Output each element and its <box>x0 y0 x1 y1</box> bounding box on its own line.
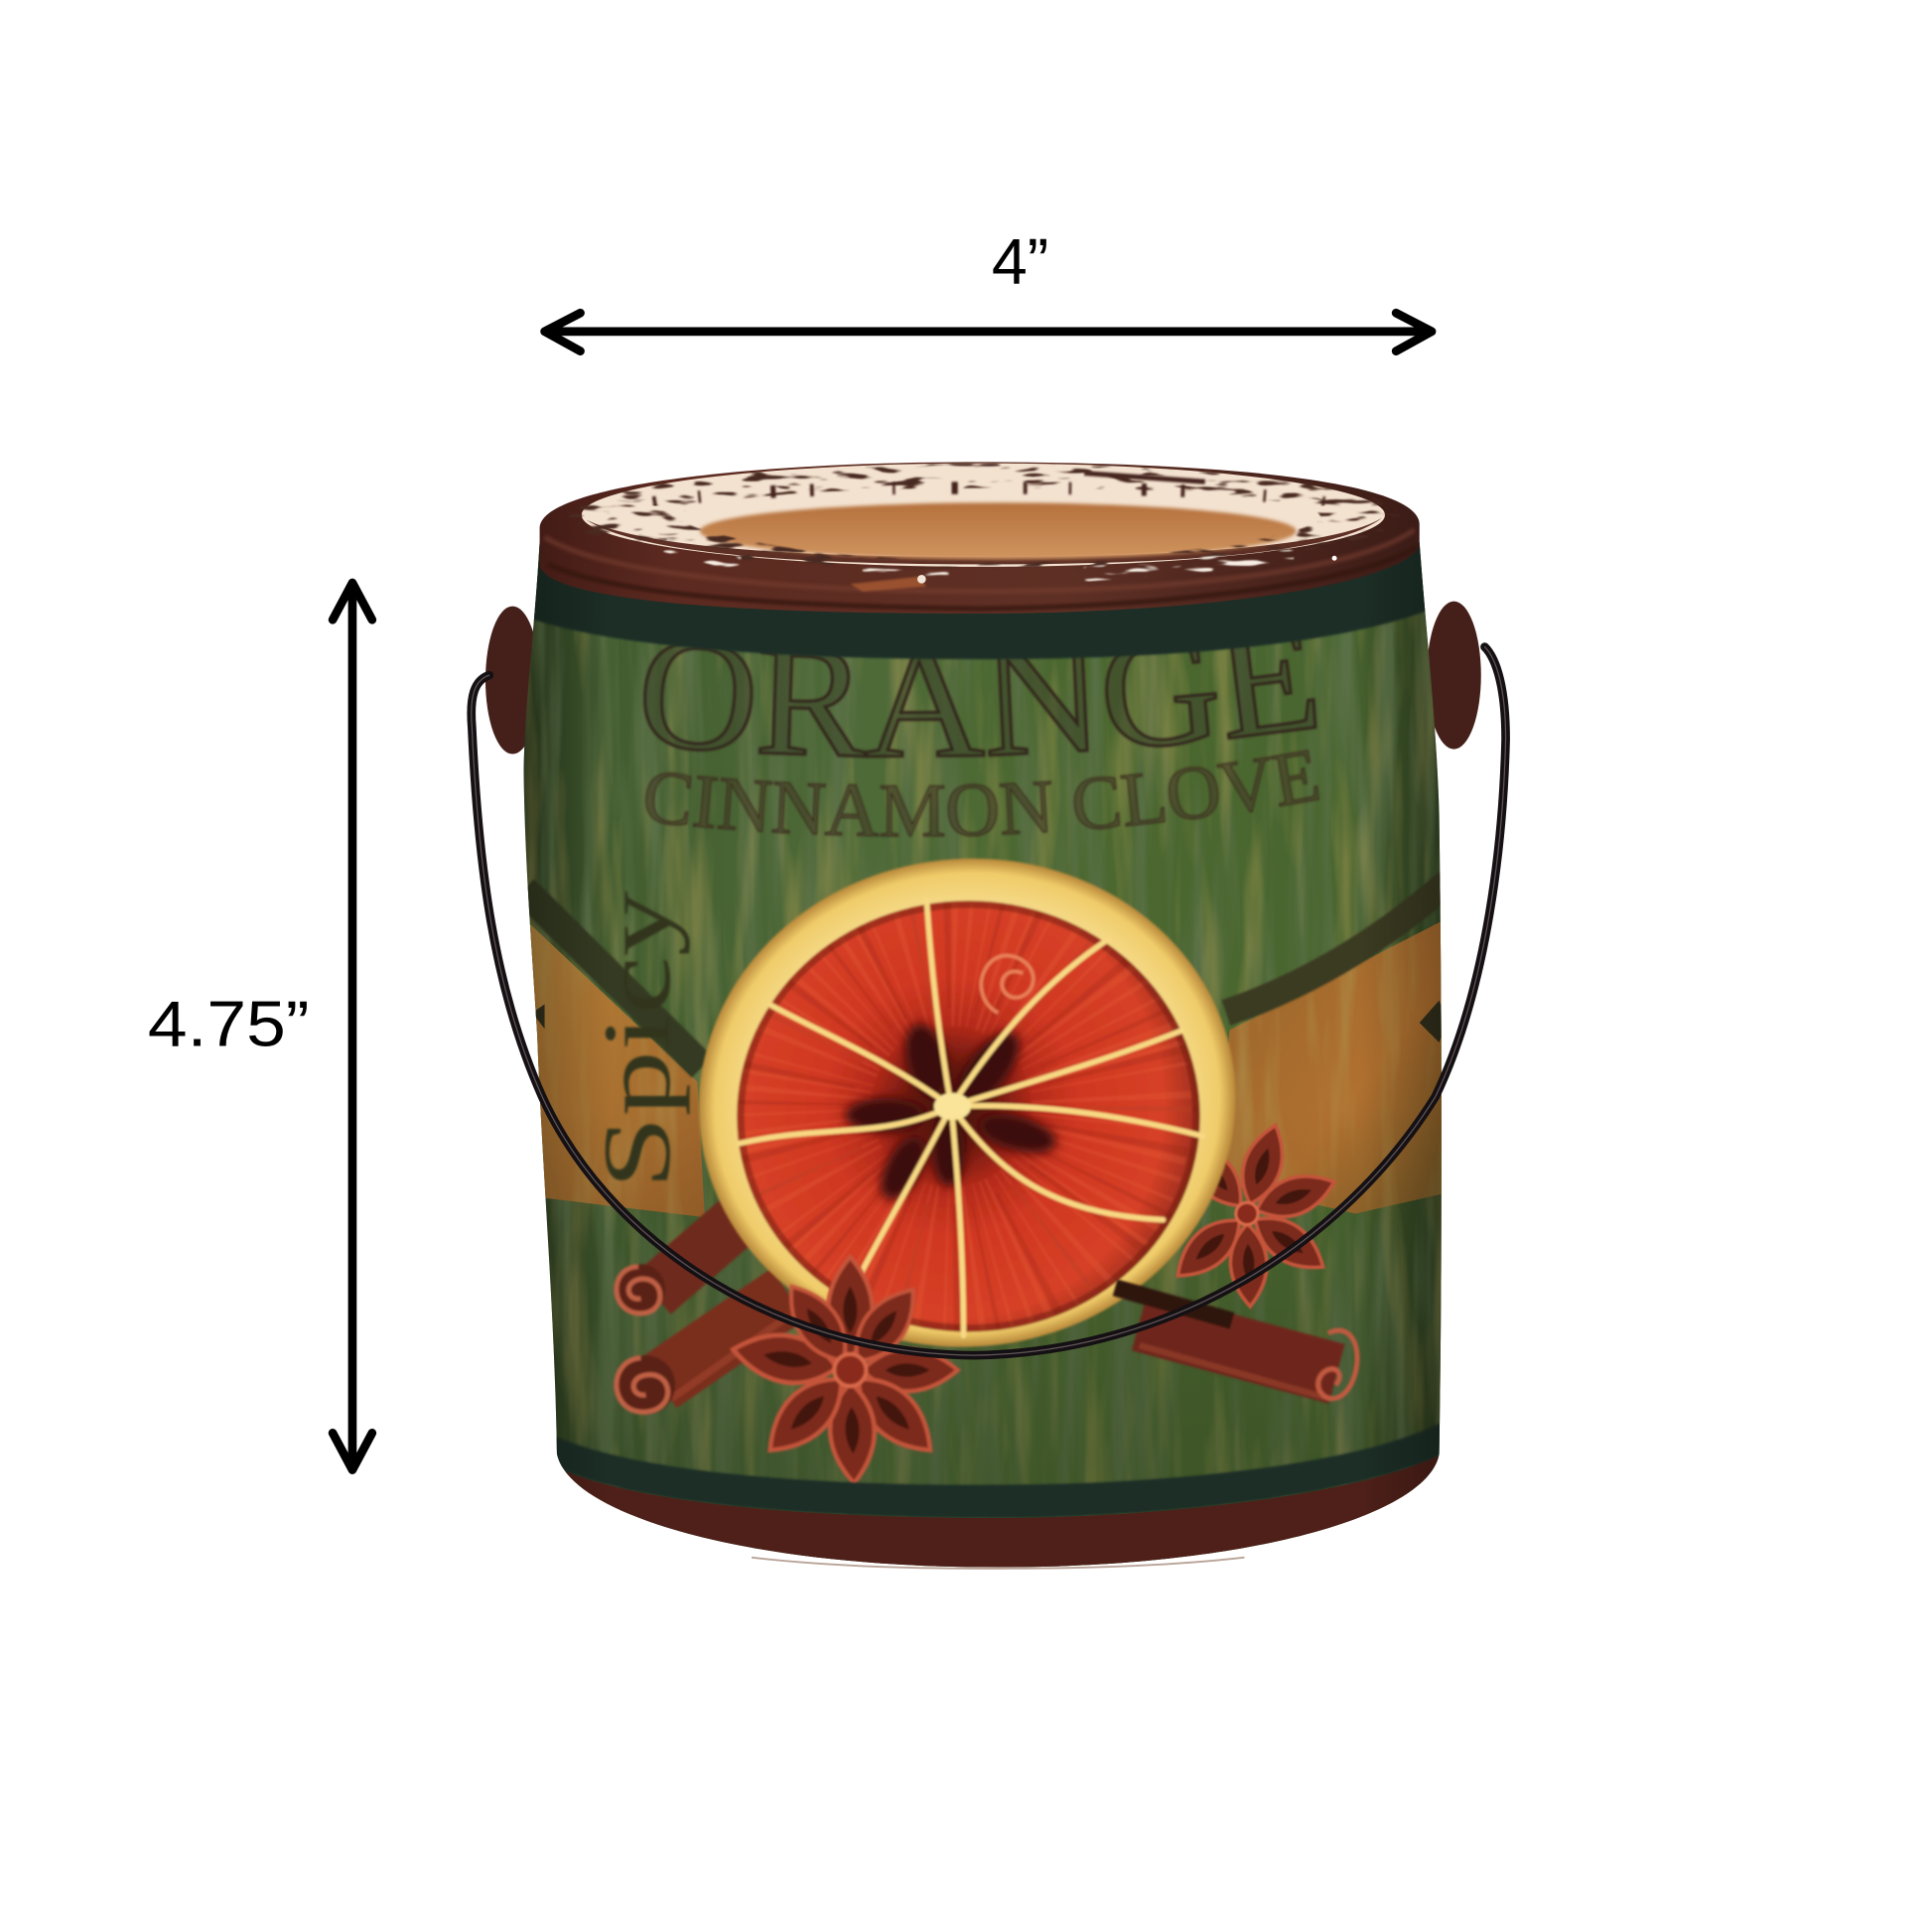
inner glazed wall <box>582 464 1385 567</box>
rim chip marks <box>850 577 926 592</box>
left dark ribbon stripe <box>523 890 702 1067</box>
left orange panel <box>523 918 705 1217</box>
rim <box>540 462 1420 614</box>
slice flesh <box>737 900 1200 1332</box>
warm streaks <box>524 614 1442 1515</box>
left handle lug <box>485 607 540 755</box>
right orange panel <box>1213 918 1448 1213</box>
green label background <box>517 530 1453 1578</box>
width label: 4” <box>992 225 1048 297</box>
right star anise <box>1166 1120 1340 1308</box>
right dark ribbon stripe <box>1226 883 1448 1013</box>
dark blotches around centre <box>845 1019 1060 1206</box>
label text: Spicy: Spicy <box>584 890 690 1189</box>
bottom brown base <box>548 1451 1448 1578</box>
bright pulp fibres <box>791 946 1111 1267</box>
white chips on front lip <box>665 545 1294 576</box>
slice rind <box>698 857 1236 1348</box>
top dark band <box>517 530 1453 659</box>
bottom dark band <box>548 1420 1448 1518</box>
rim lower highlight <box>545 530 1415 592</box>
left cinnamon sticks <box>617 1213 788 1415</box>
label text: CINNAMON CLOVE: CINNAMON CLOVE <box>643 749 1320 838</box>
rosette swirl <box>981 956 1034 1013</box>
left panel ornament <box>536 1005 545 1029</box>
candle: painted ceramic pail <box>467 462 1510 1570</box>
flesh edge shadow <box>740 903 1197 1329</box>
cylinder shading <box>517 530 1453 1578</box>
lower darkening <box>549 1185 1442 1567</box>
inner brown front lip <box>587 517 1382 564</box>
orange slice <box>698 857 1236 1348</box>
distressed glaze ring <box>567 464 1400 569</box>
rim lower shadow <box>548 547 1417 609</box>
flesh base colour <box>737 900 1200 1332</box>
wax surface <box>700 502 1297 559</box>
wire bail handle <box>472 647 1506 1355</box>
base edge highlight <box>752 1558 1244 1569</box>
right cinnamon stick <box>1115 1288 1357 1399</box>
dark green streaks <box>517 530 1453 1578</box>
can body label <box>524 542 1442 1568</box>
label text: ORANGE: ORANGE <box>641 639 1318 759</box>
bottom star anise <box>729 1257 958 1484</box>
right panel ornament <box>1420 1001 1442 1042</box>
segment membranes <box>740 899 1202 1335</box>
height dimension arrow <box>333 583 372 1470</box>
rim outer lip <box>540 462 1420 614</box>
height label: 4.75” <box>148 989 310 1060</box>
dark pulp fibres <box>778 934 1124 1279</box>
slice centre pith <box>934 1093 971 1120</box>
right handle lug <box>1427 602 1481 750</box>
hanging glaze drips <box>653 474 1324 502</box>
width dimension arrow <box>545 313 1432 351</box>
